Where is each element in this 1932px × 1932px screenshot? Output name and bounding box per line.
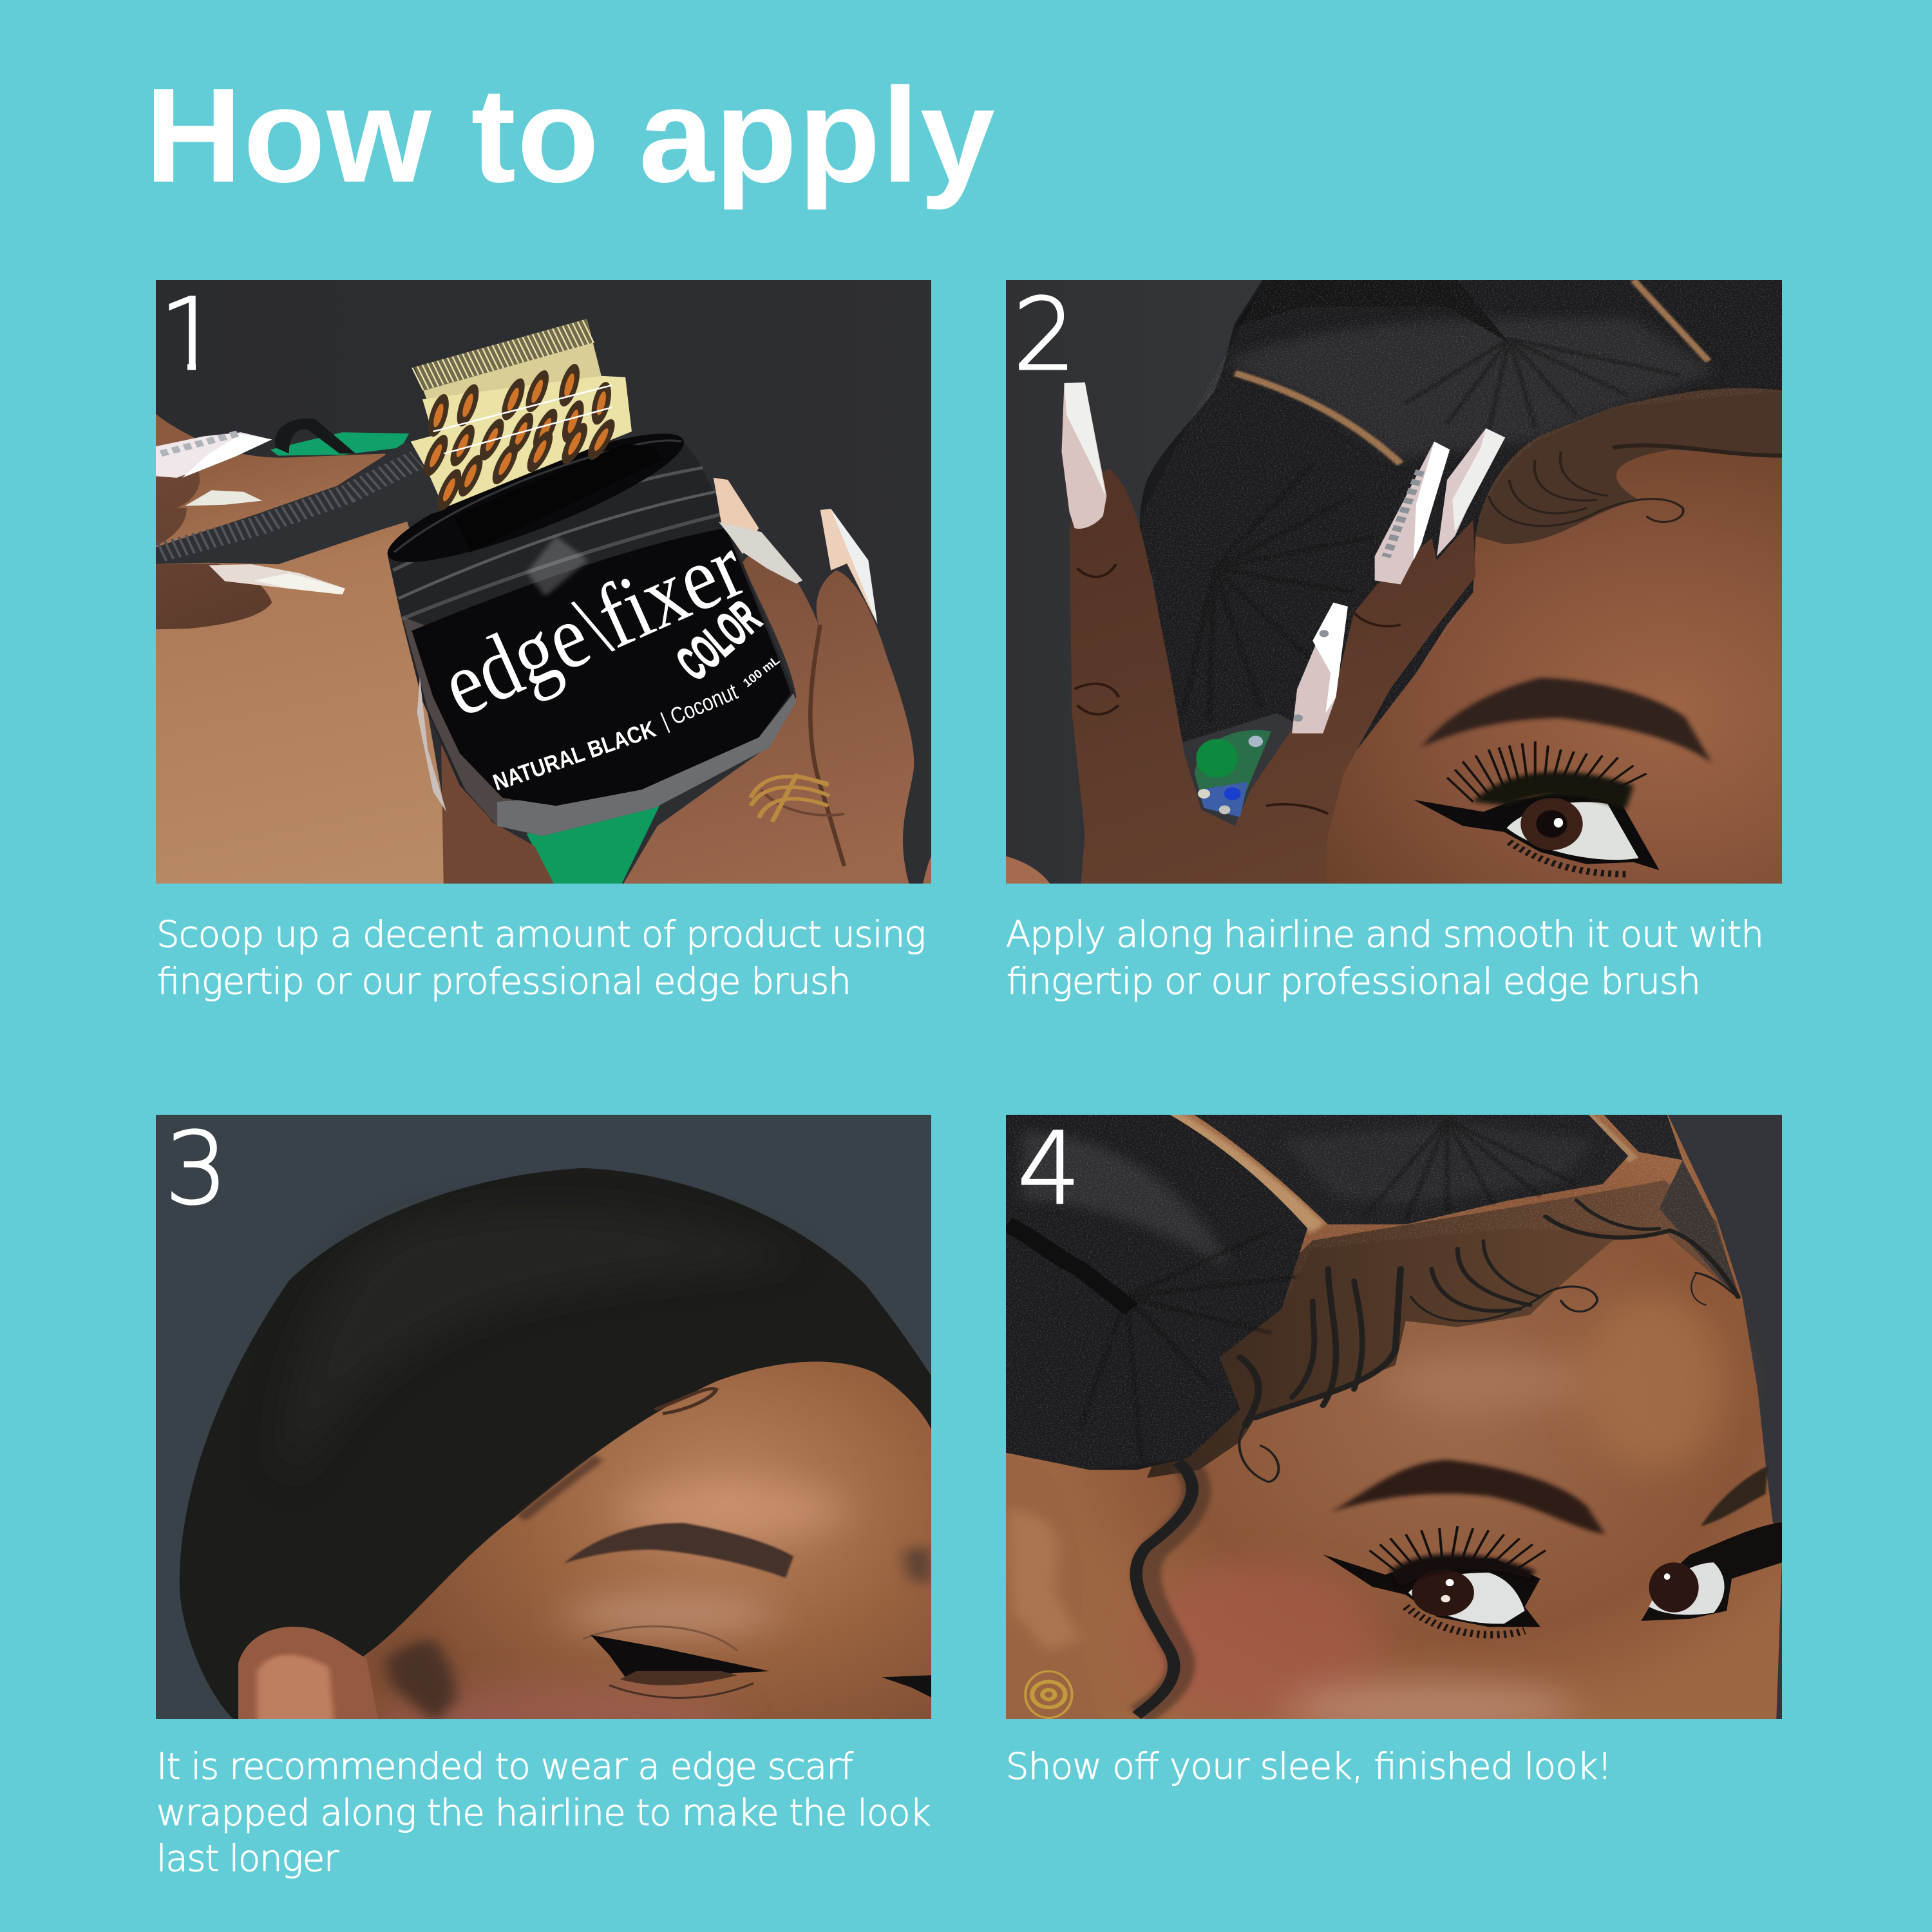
caption: step 2: Apply along hairline and smooth it out with <box>1006 914 1764 956</box>
hair curl <box>655 1389 716 1414</box>
sideburn band <box>1139 1462 1196 1716</box>
panel: step 3 photo <box>129 1108 983 1756</box>
jar label text: | Coconut <box>657 678 741 734</box>
left nails <box>150 432 345 594</box>
jar opening <box>370 413 701 582</box>
caption: step 1: fingertip or our professional edge brush <box>157 961 851 1003</box>
jewelled ring <box>1195 730 1271 817</box>
right eye <box>882 1675 931 1698</box>
step number 3: 3 <box>165 1112 228 1227</box>
right brow <box>1701 1466 1768 1526</box>
hair grain <box>992 1115 1737 1470</box>
cheek blush <box>1142 1562 1380 1723</box>
skin: face <box>364 1358 951 1736</box>
closed eye <box>583 1626 770 1698</box>
title: How to apply <box>145 61 995 211</box>
fine edge hair <box>521 1458 599 1519</box>
left hand fingers <box>150 471 272 630</box>
jar label text: edge\fixer <box>427 515 758 736</box>
cheek blush <box>380 1683 732 1756</box>
green strap <box>270 419 409 456</box>
skin: face <box>992 1108 1782 1736</box>
hair strands <box>1183 339 1680 721</box>
right eye <box>1641 1522 1782 1621</box>
right forehead warm <box>1582 1293 1727 1470</box>
caption: step 3: wrapped along the hairline to make the look <box>156 1792 931 1834</box>
caption: step 2 <box>1006 914 1764 1003</box>
sideburn <box>385 1639 456 1723</box>
step number 2: 2 <box>1013 278 1076 393</box>
eye <box>1414 741 1660 875</box>
forehead highlight <box>1380 1353 1597 1410</box>
nails <box>1061 383 1505 734</box>
earring <box>1025 1671 1072 1718</box>
skin: face <box>1323 439 1788 898</box>
eyelid highlight <box>562 1595 775 1635</box>
caption: step 2: fingertip or our professional edge brush <box>1007 961 1701 1003</box>
hand and fingers <box>1070 469 1475 898</box>
braid <box>1007 1224 1132 1309</box>
brown edge-hair band <box>1147 1180 1738 1478</box>
rings <box>751 775 829 822</box>
hair grain <box>1139 280 1782 753</box>
jar <box>370 413 796 836</box>
jar label text <box>427 515 782 796</box>
left eye <box>1323 1526 1546 1635</box>
tan partings <box>1168 1115 1633 1229</box>
hair <box>992 1108 1739 1470</box>
ear <box>992 1454 1103 1736</box>
hair strands <box>1080 1120 1577 1462</box>
black scarf <box>180 1168 940 1723</box>
caption: step 1 <box>156 914 926 1003</box>
step number 4: 4 <box>1018 1112 1081 1227</box>
panel: step 2 photo <box>992 270 1820 914</box>
thumb <box>1006 856 1054 890</box>
leopard print comb <box>411 319 632 513</box>
jar label text: NATURAL BLACK <box>489 715 659 796</box>
brush handle <box>150 442 442 564</box>
jar label <box>412 528 791 806</box>
brush bristles <box>455 444 663 553</box>
green shirt <box>527 805 660 884</box>
panel: step 4 photo <box>992 1108 1820 1752</box>
caption: step 4: Show off your sleek, finished look! <box>1006 1746 1612 1788</box>
knuckle creases <box>1075 564 1401 814</box>
right eyebrow <box>903 1546 931 1585</box>
right hand <box>441 549 940 898</box>
jar label text: 100 mL <box>741 654 782 690</box>
brow <box>1421 677 1712 764</box>
jar label text: COLOR <box>667 591 771 691</box>
eyebrow <box>564 1523 793 1578</box>
shoulder <box>156 414 444 884</box>
right nails <box>417 478 877 812</box>
forehead highlight <box>620 1482 844 1539</box>
hair sheen upper <box>1282 1124 1597 1204</box>
caption: step 3: It is recommended to wear a edge scarf <box>156 1746 853 1788</box>
caption: step 1: Scoop up a decent amount of product using <box>156 914 926 956</box>
left brow <box>1331 1460 1605 1534</box>
nose highlight <box>1287 1680 1577 1736</box>
ear <box>238 1627 380 1727</box>
caption: step 3: last longer <box>156 1838 339 1880</box>
panel: step 1 photo <box>156 280 931 884</box>
baby hair strokes <box>1239 1200 1738 1482</box>
step number 1: 1 <box>159 278 222 393</box>
baby hair curl <box>1488 446 1782 526</box>
hair <box>1140 270 1788 753</box>
sideburn strand <box>1136 1462 1192 1716</box>
caption: step 3 <box>156 1746 931 1880</box>
hair sheen <box>1023 1132 1230 1269</box>
